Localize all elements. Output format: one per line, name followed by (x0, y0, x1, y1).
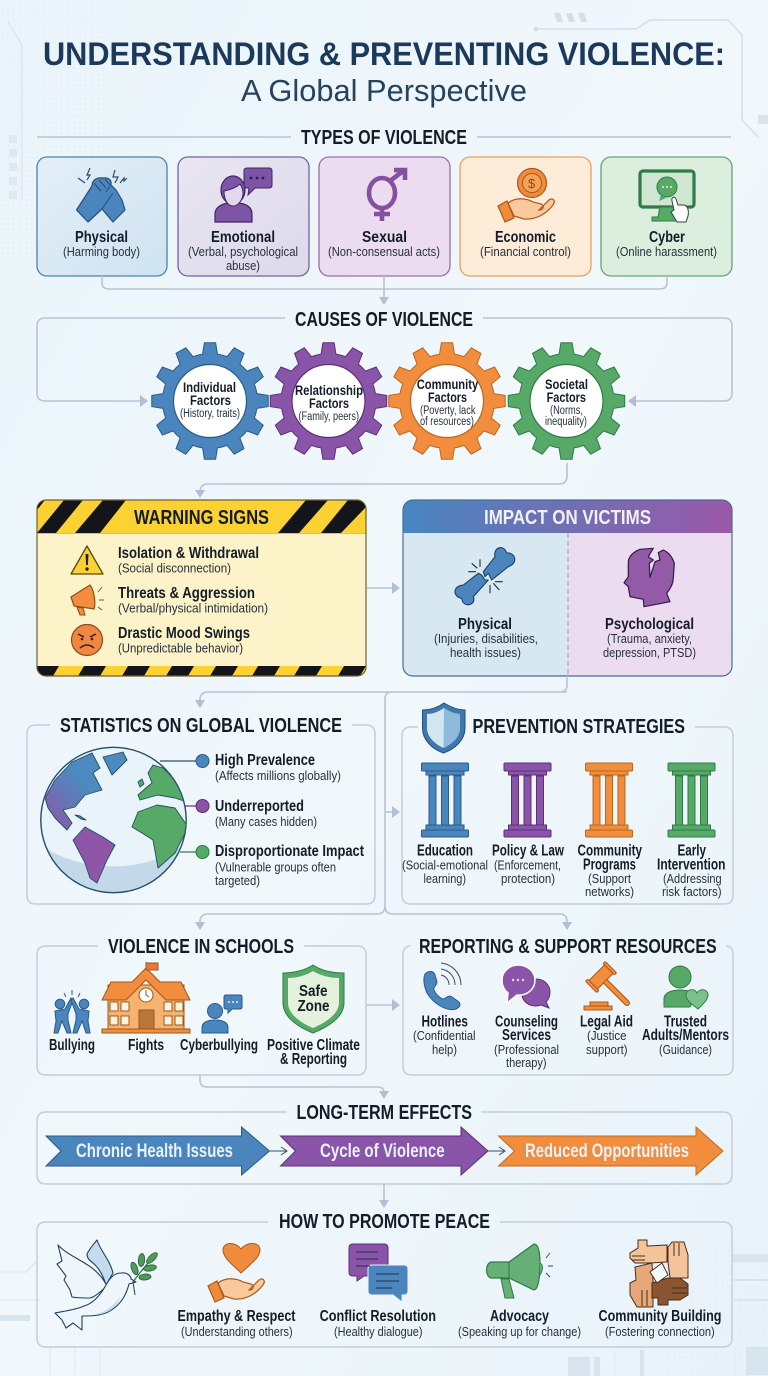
connector: causes to warning signs (195, 463, 567, 498)
item: advocacy: (Speaking up for change) (458, 1324, 581, 1339)
panel: prevention strategies (402, 703, 733, 904)
warning item: mood swings: Drastic Mood Swings (118, 625, 250, 642)
gear: individual factors (152, 343, 268, 459)
impact column: physical: Physical (458, 616, 512, 633)
impact column: physical: (Injuries, disabilities, (434, 631, 538, 646)
callout: disproportionate impact: targeted) (215, 873, 260, 888)
gear: individual factors: Factors (190, 393, 231, 408)
resource: legal aid: Legal Aid (580, 1014, 633, 1030)
callout: high prevalence: (Affects millions globally) (215, 768, 341, 783)
icon: shield (422, 703, 465, 753)
resource: legal aid: support) (586, 1042, 628, 1057)
card: cyber (601, 157, 732, 276)
panel: statistics on global violence (27, 715, 375, 904)
item: empathy and respect (178, 1243, 296, 1339)
callout: disproportionate impact: Disproportionate Impact (215, 843, 364, 860)
arrow: cycle of violence: Cycle of Violence (320, 1140, 445, 1162)
icon: coin over hand: $ (528, 176, 536, 191)
card: sexual (319, 157, 450, 276)
arrow: warning to impact (367, 582, 400, 594)
icon: bullying figures (54, 990, 90, 1033)
icon: megaphone (71, 585, 104, 615)
resource: hotlines (413, 963, 476, 1057)
impact column: physical: health issues) (450, 645, 521, 660)
warning item: mood swings (118, 625, 250, 656)
gear: individual factors: Individual (183, 380, 236, 395)
panel: violence in schools (37, 936, 366, 1075)
heading: impact: IMPACT ON VICTIMS (484, 507, 651, 529)
panel: long-term effects (37, 1102, 732, 1184)
heading: statistics: STATISTICS ON GLOBAL VIOLENCE (60, 715, 342, 737)
icon: clasped hands (76, 168, 127, 222)
label: positive climate (267, 1037, 360, 1068)
resource: counseling services: Services (502, 1027, 551, 1044)
impact column: psychological (603, 616, 696, 660)
icon: warning triangle (71, 546, 103, 574)
item: community building (598, 1240, 722, 1339)
icon: broken bone (455, 548, 515, 605)
item: advocacy (458, 1244, 581, 1339)
heading: prevention: PREVENTION STRATEGIES (472, 716, 685, 738)
pillar: policy and law: Policy & Law (492, 842, 565, 860)
gear: community factors: of resources) (420, 416, 474, 428)
heading: warning signs: WARNING SIGNS (134, 507, 269, 529)
pillar: community programs: (Support (588, 871, 631, 886)
arrow: long-term effects to peace (379, 1184, 389, 1208)
arrow: link two (488, 1147, 505, 1155)
pillar: education (402, 763, 488, 886)
card: emotional: Emotional (211, 229, 275, 246)
icon: dove with olive branch (55, 1240, 159, 1330)
impact column: psychological: Psychological (605, 616, 694, 633)
gear: relationship factors: Factors (309, 396, 349, 411)
pillar: education: learning) (424, 871, 466, 886)
icon: gender symbol (369, 170, 405, 221)
gear: relationship factors: (Family, peers) (298, 411, 359, 423)
connector: types to causes (102, 276, 667, 305)
pillar: community programs: Programs (583, 856, 636, 874)
warning item: threats (118, 585, 268, 616)
card: emotional: (Verbal, psychological (188, 244, 298, 259)
resource: hotlines: (Confidential (413, 1028, 476, 1043)
warning item: isolation (118, 545, 259, 576)
gear: community factors: Community (417, 377, 479, 392)
gear: community factors: (Poverty, lack (420, 405, 476, 417)
arrow: chronic health issues: Chronic Health Issues (76, 1140, 233, 1162)
heading: causes: CAUSES OF VIOLENCE (295, 309, 473, 331)
panel: warning signs (31, 500, 366, 676)
impact column: psychological: (Trauma, anxiety, (607, 631, 692, 646)
pillar: community programs: Community (578, 842, 642, 860)
arrow: reduced opportunities (498, 1127, 723, 1175)
card: economic: (Financial control) (480, 244, 571, 259)
title: A Global Perspective (241, 73, 527, 108)
card: cyber: Cyber (649, 229, 685, 246)
connector: schools to long-term effects (200, 1075, 389, 1099)
resource: legal aid: (Justice (587, 1028, 626, 1043)
section: causes of violence (37, 309, 732, 459)
card: cyber: (Online harassment) (616, 244, 717, 259)
heading: peace: HOW TO PROMOTE PEACE (279, 1211, 490, 1233)
item: community building: (Fostering connection) (605, 1324, 715, 1339)
label: bullying: Bullying (49, 1037, 95, 1054)
card: physical: (Harming body) (63, 244, 140, 259)
pillar: early intervention: risk factors) (662, 884, 722, 899)
section: types of violence (37, 127, 732, 276)
arrow: link one (270, 1147, 287, 1155)
gear: relationship factors: Relationship (295, 383, 363, 398)
pillar: policy and law: (Enforcement, (494, 858, 561, 872)
callout: disproportionate impact (180, 843, 364, 888)
arrow: chronic health issues (46, 1127, 270, 1175)
item: empathy and respect: Empathy & Respect (178, 1308, 296, 1325)
resource: hotlines: Hotlines (422, 1014, 468, 1030)
card: sexual: (Non-consensual acts) (328, 244, 440, 259)
resource: trusted adults: Adults/Mentors (642, 1027, 729, 1044)
pillar: community programs: networks) (585, 884, 634, 899)
resource: counseling services: therapy) (506, 1055, 547, 1070)
resource: hotlines: help) (432, 1042, 457, 1057)
pillar: early intervention (657, 763, 726, 899)
pillar: early intervention: (Addressing (663, 871, 722, 886)
resource: counseling services: Counseling (495, 1014, 558, 1030)
impact column: psychological: depression, PTSD) (603, 645, 696, 660)
label: cyberbullying: Cyberbullying (180, 1037, 258, 1054)
resource: counseling services (494, 965, 559, 1070)
connectors: impact to statistics, prevention, schools and reporting (195, 676, 572, 930)
gear: community factors (389, 343, 505, 459)
card: physical (37, 157, 167, 276)
gear: societal factors: Factors (547, 390, 586, 405)
warning item: isolation: (Social disconnection) (118, 560, 231, 576)
panel: how to promote peace (37, 1211, 732, 1347)
pillar: early intervention: Early (678, 842, 706, 860)
title (43, 36, 725, 108)
panel: impact on victims (403, 500, 732, 676)
label: fights: Fights (128, 1037, 164, 1054)
icon: fractured head (624, 548, 674, 607)
globe (40, 746, 187, 894)
icon: monitor with chat and pointer (640, 171, 694, 222)
resource: trusted adults: (Guidance) (659, 1042, 712, 1057)
label: positive climate: & Reporting (280, 1051, 347, 1068)
callout: underreported: (Many cases hidden) (215, 814, 317, 829)
card: economic (460, 157, 591, 276)
impact column: physical (434, 616, 538, 660)
callout: high prevalence (160, 752, 341, 783)
item: conflict resolution: Conflict Resolution (320, 1308, 436, 1325)
callout: high prevalence: High Prevalence (215, 752, 315, 769)
callout: underreported (185, 798, 317, 829)
card: sexual: Sexual (362, 229, 407, 246)
pillar: early intervention: Intervention (657, 856, 726, 874)
resource: trusted adults: Trusted (664, 1014, 707, 1030)
callout: underreported: Underreported (215, 798, 304, 815)
gear: individual factors: (History, traits) (180, 408, 240, 420)
item: empathy and respect: (Understanding others) (181, 1324, 293, 1339)
pillar: education: Education (417, 842, 473, 860)
heading: long-term effects: LONG-TERM EFFECTS (296, 1102, 472, 1124)
item: conflict resolution: (Healthy dialogue) (334, 1324, 422, 1339)
card: physical: Physical (75, 229, 128, 246)
gear: societal factors (508, 343, 625, 459)
callout: disproportionate impact: (Vulnerable groups often (215, 860, 336, 874)
gear: community factors: Factors (428, 390, 467, 405)
heading: types: TYPES OF VIOLENCE (301, 127, 467, 149)
label: positive climate: Positive Climate (267, 1037, 360, 1054)
icon: school building (102, 962, 190, 1033)
card: emotional: abuse) (226, 258, 260, 273)
pillar: policy and law: protection) (501, 871, 555, 886)
warning item: threats: Threats & Aggression (118, 585, 255, 602)
resource: counseling services: (Professional (494, 1042, 559, 1057)
icon: safe zone shield: Zone (298, 998, 330, 1015)
item: conflict resolution (320, 1244, 436, 1339)
resource: legal aid (580, 961, 633, 1057)
pillar: policy and law (492, 763, 565, 886)
arrow: schools to reporting (367, 999, 400, 1011)
resource: trusted adults (642, 966, 729, 1057)
gear: societal factors: (Norms, (550, 405, 583, 417)
pillar: education: (Social-emotional (402, 858, 488, 872)
icon: person with speech bubble (215, 168, 272, 222)
icon: safe zone shield (283, 965, 344, 1033)
icon: cyberbullying (202, 995, 242, 1033)
card: emotional (178, 157, 309, 276)
title: UNDERSTANDING & PREVENTING VIOLENCE: (43, 36, 725, 72)
gear: societal factors: inequality) (545, 416, 587, 428)
pillar: community programs (578, 763, 642, 899)
warning item: isolation: Isolation & Withdrawal (118, 545, 259, 562)
arrow: reduced opportunities: Reduced Opportunities (525, 1140, 689, 1162)
item: advocacy: Advocacy (490, 1308, 549, 1325)
panel: reporting and support resources (403, 936, 733, 1075)
warning item: mood swings: (Unpredictable behavior) (118, 640, 243, 656)
card: economic: Economic (495, 229, 556, 246)
icon: angry face (72, 624, 102, 656)
arrow: cycle of violence (280, 1127, 488, 1175)
item: community building: Community Building (598, 1308, 722, 1325)
heading: schools: VIOLENCE IN SCHOOLS (108, 936, 294, 958)
icon: safe zone shield: Safe (299, 983, 328, 1000)
gear: relationship factors (270, 343, 387, 459)
gear: societal factors: Societal (545, 377, 588, 392)
warning item: threats: (Verbal/physical intimidation) (118, 600, 268, 616)
